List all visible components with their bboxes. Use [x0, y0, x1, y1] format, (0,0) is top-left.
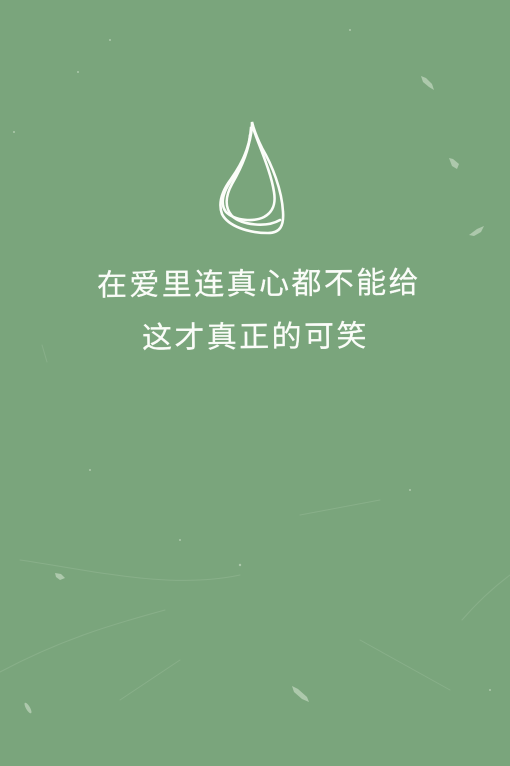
- icon: water drop: [220, 122, 283, 233]
- text: first line: 在爱里连真心都不能给: [97, 267, 421, 302]
- text: second line: 这才真正的可笑: [142, 320, 369, 355]
